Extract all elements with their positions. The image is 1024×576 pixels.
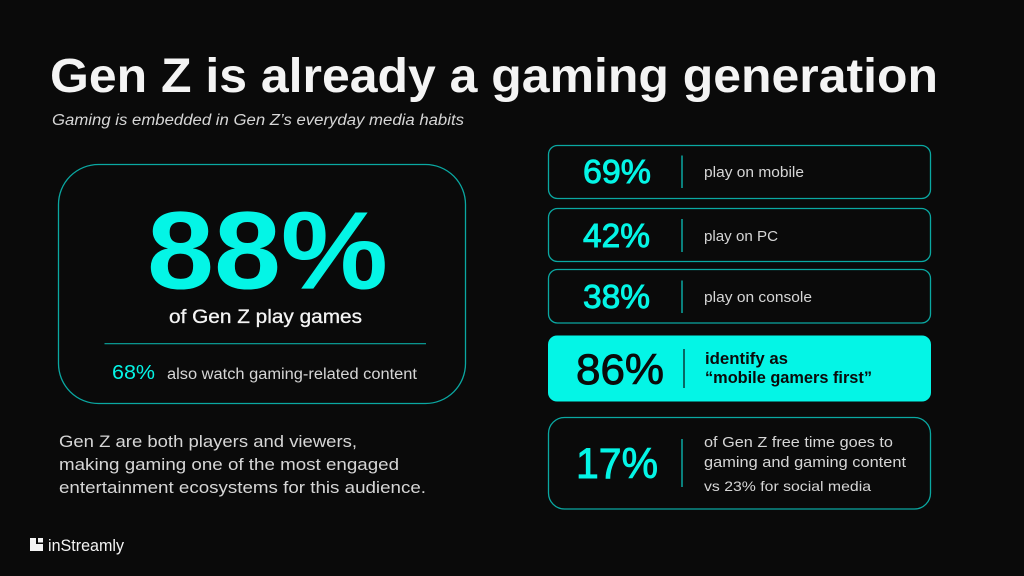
icon: logo mark: [30, 538, 43, 551]
label: identify as mobile gamers first: “mobile gamers first”: [705, 369, 872, 387]
stat label: of Gen Z play games: of Gen Z play games: [169, 307, 362, 328]
panel: mobile gamers first highlight: [548, 336, 931, 402]
logo: inStreamly: [30, 536, 124, 555]
label: play on mobile: play on mobile: [704, 165, 804, 181]
label: identify as mobile gamers first: identify as: [705, 350, 788, 368]
title: Gen Z is already a gaming generation: [50, 50, 938, 103]
label: free time description: of Gen Z free time goes to: [704, 434, 893, 451]
body text: making gaming one of the most engaged: [59, 455, 399, 474]
subtitle: Gaming is embedded in Gen Z’s everyday media habits: [52, 112, 464, 129]
stat: 17%: 17%: [576, 440, 658, 488]
panel: play on mobile: [548, 146, 930, 198]
label: play on PC: play on PC: [704, 229, 778, 245]
label: identify as mobile gamers first: [705, 350, 872, 387]
stat: 42%: 42%: [583, 217, 650, 254]
label: free time description: [704, 434, 907, 494]
label: free time description: gaming and gaming content: [704, 454, 907, 471]
panel: play on console: [548, 270, 930, 323]
body text: [59, 432, 426, 497]
stat: 38%: 38%: [583, 278, 650, 315]
secondary stat: 68%: 68%: [112, 362, 155, 384]
label: play on console: play on console: [704, 290, 812, 306]
big number: 88%: 88%: [147, 190, 388, 312]
panel: 88% headline stat: [58, 164, 466, 404]
label: free time description: vs 23% for social media: [704, 478, 871, 494]
logo wordmark: inStreamly: [48, 536, 124, 555]
stat: 86%: 86%: [576, 346, 664, 394]
panel: play on PC: [548, 208, 930, 262]
secondary stat label: also watch gaming-related content: [167, 366, 418, 383]
body text: Gen Z are both players and viewers,: [59, 432, 357, 451]
panel: free time share: [548, 418, 930, 509]
stat: 69%: 69%: [583, 153, 651, 190]
body text: entertainment ecosystems for this audience.: [59, 478, 426, 497]
